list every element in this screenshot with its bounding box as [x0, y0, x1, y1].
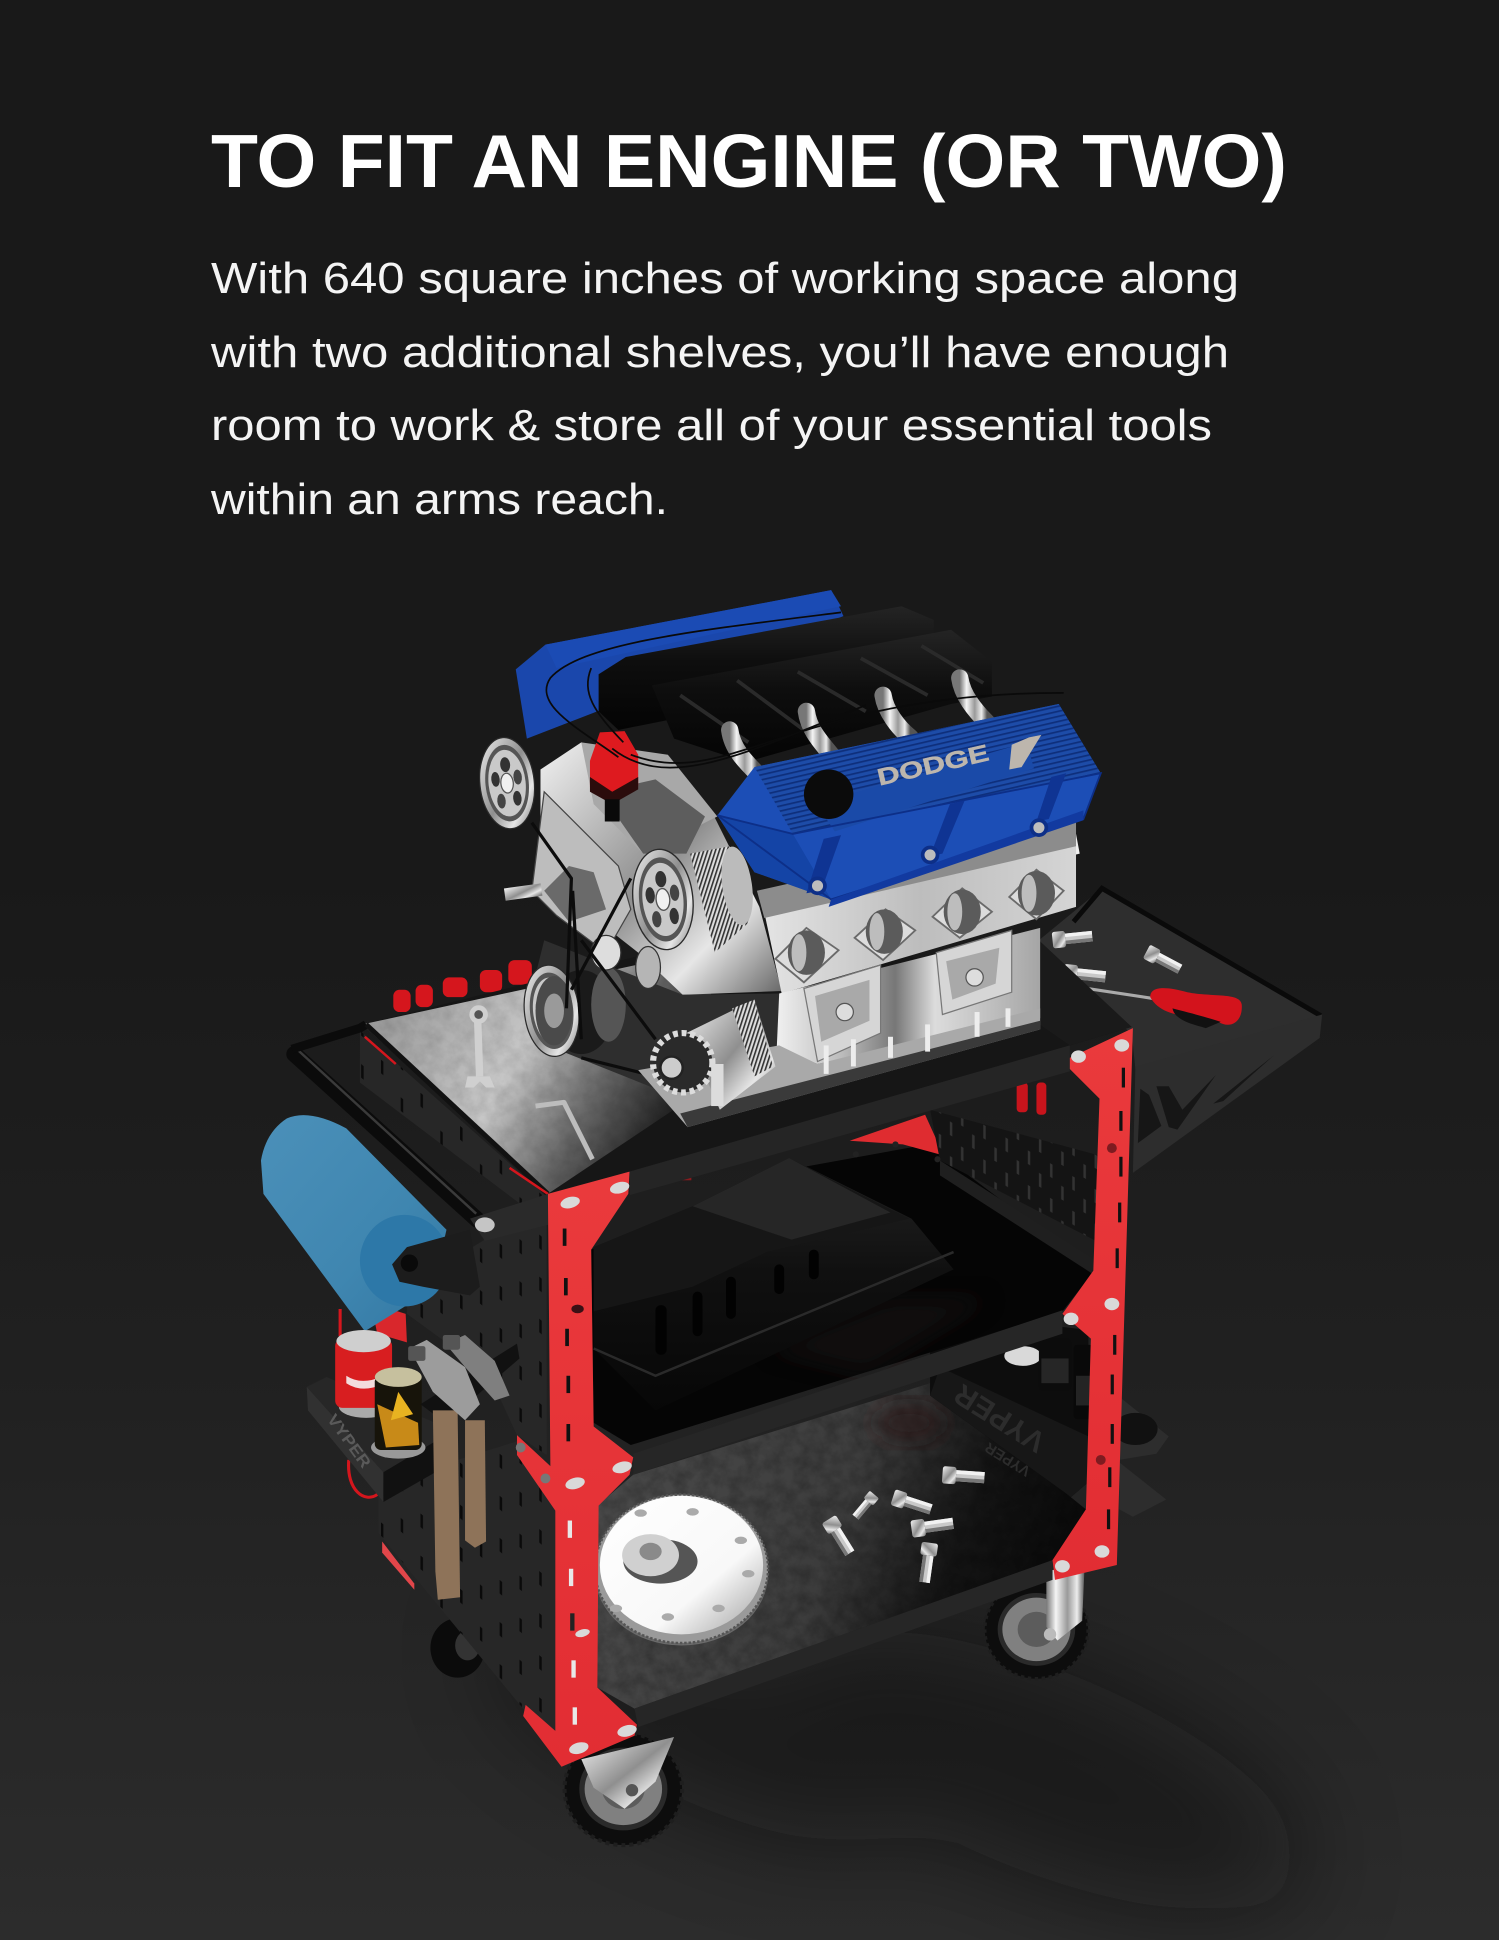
- cup holder tray: [307, 1377, 435, 1502]
- lower block: [777, 928, 1040, 1064]
- upper pegboard panel: [407, 1219, 547, 1455]
- right caster wheel: [985, 1564, 1088, 1679]
- oil filler cap: [804, 770, 853, 819]
- back panel with logo and bottles: VYPER: [982, 1438, 1034, 1479]
- front red leg: [516, 1172, 638, 1767]
- pulleys: [475, 735, 539, 832]
- flywheel: [595, 1495, 768, 1645]
- front valve cover: [717, 704, 1101, 899]
- body paragraph: with two additional shelves, you’ll have enough: [210, 328, 1229, 377]
- block plates: [804, 930, 1012, 1062]
- ribbed pulley: [690, 846, 750, 953]
- DODGE logo: DODGE: [875, 740, 991, 790]
- roll bracket: [392, 1194, 548, 1295]
- DODGE logo: [875, 735, 1041, 790]
- exhaust ports: [775, 870, 1064, 982]
- bolts on tray: [1052, 928, 1184, 985]
- front caster wheel: [565, 1733, 682, 1845]
- valve cover gasket rail: [763, 834, 1080, 928]
- intake manifold runners front: [652, 630, 992, 762]
- loose bolts on bottom shelf: [822, 1466, 985, 1584]
- paper towel roll: [261, 1115, 449, 1331]
- top shelf surface: [362, 918, 1132, 1225]
- body paragraph: [210, 254, 1239, 524]
- cart illustration: [261, 590, 1322, 1845]
- belts: [532, 823, 656, 1076]
- body paragraph: With 640 square inches of working space along: [211, 254, 1239, 303]
- engine: [475, 590, 1101, 1127]
- cylinder head: [763, 834, 1076, 993]
- spark plug wires: [546, 612, 1064, 768]
- rear valve cover: [516, 590, 843, 739]
- right red leg: [1053, 1028, 1133, 1580]
- screwdriver: [1071, 986, 1242, 1028]
- red wire and bracket: [340, 1303, 407, 1497]
- yellow energy drink can: [375, 1367, 422, 1450]
- timing cover side: [540, 742, 782, 995]
- bottom shelf surface: [597, 1383, 1086, 1727]
- alternator: [653, 1000, 775, 1110]
- red soda can: [335, 1330, 392, 1408]
- red pliers under top shelf: [1017, 1083, 1046, 1115]
- back panel with logo and bottles: [930, 1311, 1093, 1497]
- wrench: [465, 1005, 495, 1087]
- valve cover bolts: [810, 820, 1046, 893]
- base plate: [638, 1008, 1040, 1127]
- floor shadow under cart: [471, 1572, 1337, 1940]
- chrome runners: [730, 678, 987, 773]
- body paragraph: within an arms reach.: [210, 475, 668, 524]
- rear cup holders: [1113, 1397, 1169, 1517]
- rear left wheel: [430, 1618, 485, 1678]
- distributor: [590, 731, 638, 822]
- oil pan: [594, 1158, 954, 1410]
- lower pegboard panel: [378, 1441, 555, 1736]
- middle shelf interior: [591, 1115, 1095, 1445]
- left top handle rail: [292, 1024, 548, 1225]
- accessory brackets: [532, 792, 631, 953]
- side tray on right: [1039, 888, 1322, 1173]
- cup holder tray: VYPER: [323, 1411, 374, 1472]
- body paragraph: room to work & store all of your essential tools: [211, 401, 1212, 450]
- title: TO FIT AN ENGINE (OR TWO): [211, 119, 1287, 203]
- middle shelf front edge: [633, 1310, 1062, 1475]
- rear pegboard: [853, 1110, 1100, 1274]
- allen key: [536, 1102, 592, 1159]
- hammers: [408, 1335, 519, 1600]
- back panel with logo and bottles: VYPER: [948, 1377, 1051, 1458]
- red accents behind top shelf: [393, 960, 532, 1012]
- intake manifold runners rear: [599, 606, 934, 730]
- small red corner plate: [382, 1542, 414, 1590]
